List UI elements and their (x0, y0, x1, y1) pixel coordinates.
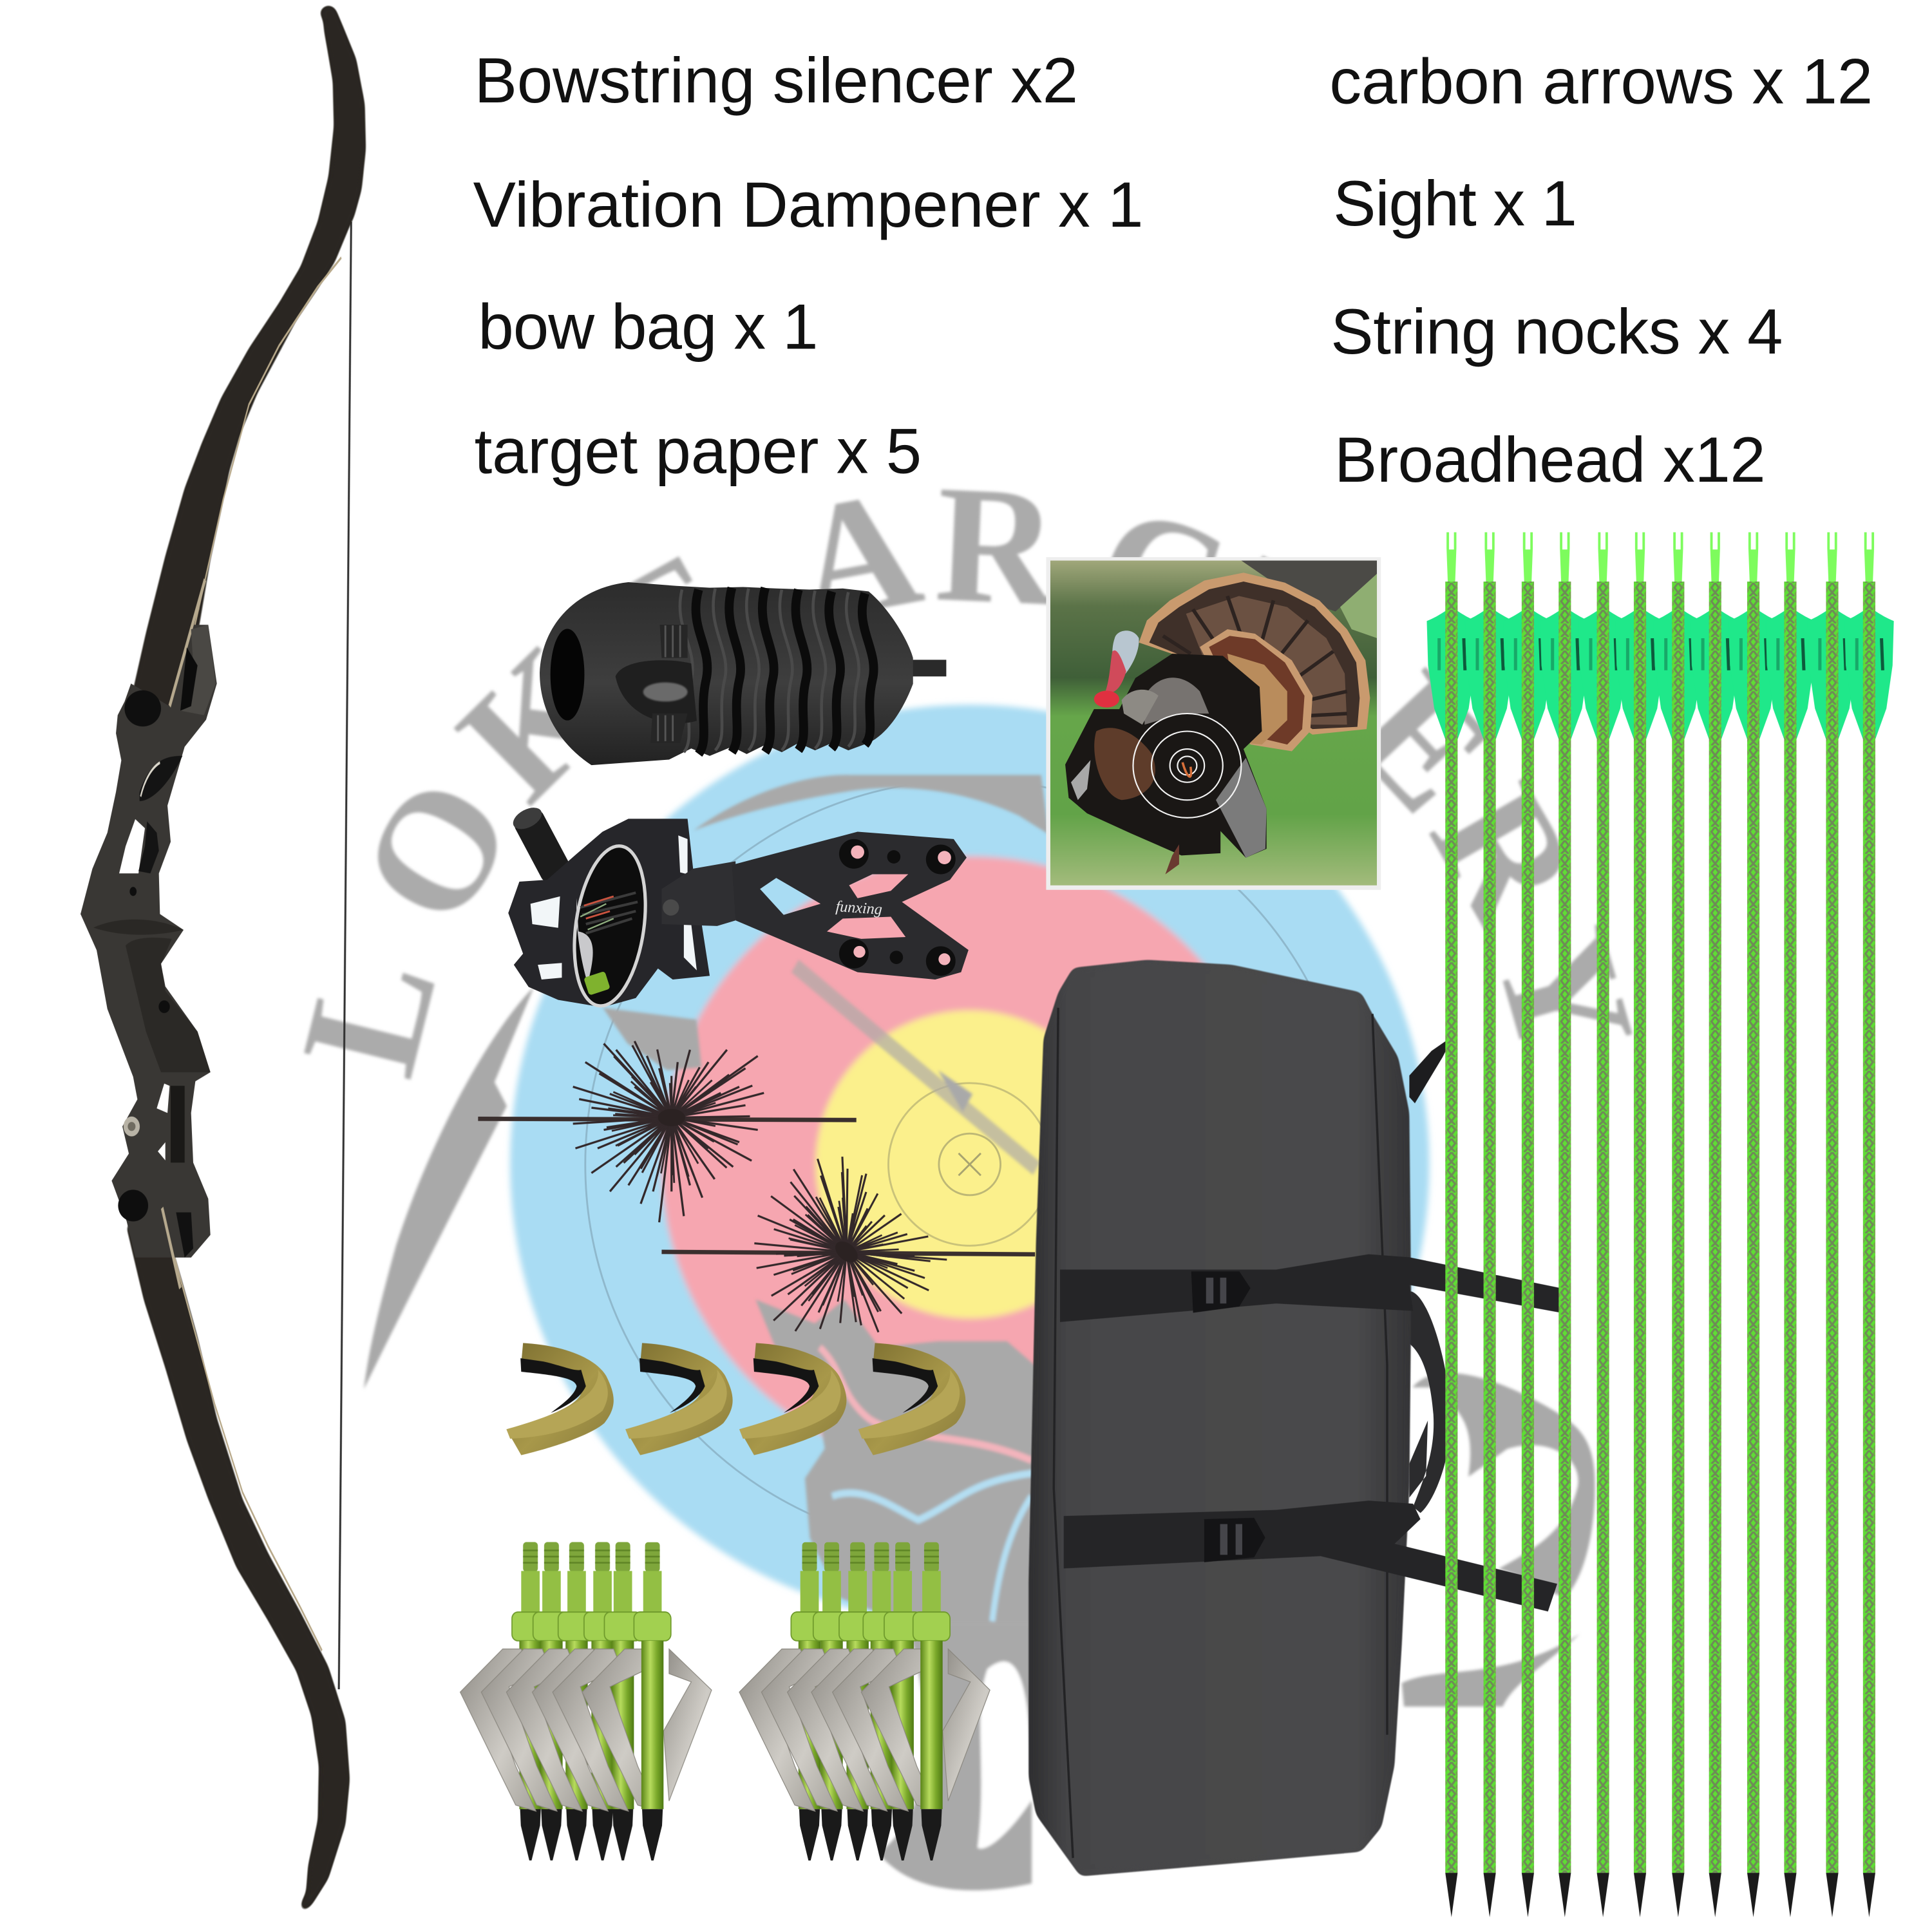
turkey inner ruffle (1200, 629, 1312, 752)
watermark: brand text on arc: R (1396, 756, 1618, 955)
string nocks (506, 1343, 965, 1455)
bowstring (339, 222, 351, 1689)
watermark: brand text on arc: R (933, 451, 1063, 641)
carbon arrows (1427, 533, 1894, 1917)
watermark: logo silhouette (364, 775, 1595, 1890)
broadheads: second set (739, 1542, 990, 1861)
turkey head and wattle (1112, 630, 1139, 678)
riser (80, 580, 217, 1288)
bag handle (1409, 1291, 1451, 1513)
bag straps and buckles (1054, 1008, 1561, 1858)
parts list: right column: carbon arrows x 12 (1329, 46, 1873, 118)
sight bracket (732, 831, 969, 980)
watermark: brand text on arc: A (781, 453, 933, 658)
sight (508, 803, 969, 1010)
watermark: brand text on arc: Y (1459, 910, 1671, 1077)
recurve bow (80, 5, 366, 1913)
bow bag (1028, 960, 1561, 1877)
parts list: left column (473, 45, 1144, 488)
watermark: brand text on arc: K (424, 611, 648, 835)
target paper with turkey (1046, 557, 1381, 890)
bowstring silencer 2 (661, 1133, 1035, 1385)
watermark: brand text on arc: H (1185, 520, 1392, 747)
sight knob (509, 803, 573, 884)
parts list: right column: String nocks x 4 (1331, 296, 1783, 368)
turkey body (1065, 654, 1267, 858)
watermark: brand text on arc: O (323, 747, 549, 953)
watermark: brand text on arc: L (265, 938, 473, 1092)
watermark: brand text on arc: E (1316, 638, 1528, 846)
lower limb (126, 1224, 350, 1913)
watermark: brand text on arc: E (576, 515, 763, 731)
background: archery target (510, 705, 1429, 1624)
parts list: right column: Broadhead x12 (1334, 424, 1766, 496)
turkey tail fan (1139, 573, 1370, 735)
parts list: right column (1329, 46, 1873, 496)
watermark: brand text on arc: C (1075, 469, 1247, 683)
sight housing (508, 819, 710, 1007)
sight: funxing (835, 898, 883, 918)
parts list: left column: bow bag x 1 (478, 291, 818, 363)
broadheads: first set (460, 1542, 712, 1861)
parts list: left column: Vibration Dampener x 1 (473, 169, 1144, 241)
paper target rings (1133, 714, 1241, 818)
upper limb (129, 5, 366, 708)
parts list: left column: target paper x 5 (475, 416, 922, 488)
parts list: left column: Bowstring silencer x2 (475, 45, 1078, 117)
parts list: right column: Sight x 1 (1333, 168, 1577, 240)
stabilizer / vibration dampener (540, 582, 946, 765)
bag body (1028, 960, 1411, 1877)
bowstring silencer 1 (478, 1037, 857, 1222)
watermark: brand text on arc (265, 451, 1671, 1092)
